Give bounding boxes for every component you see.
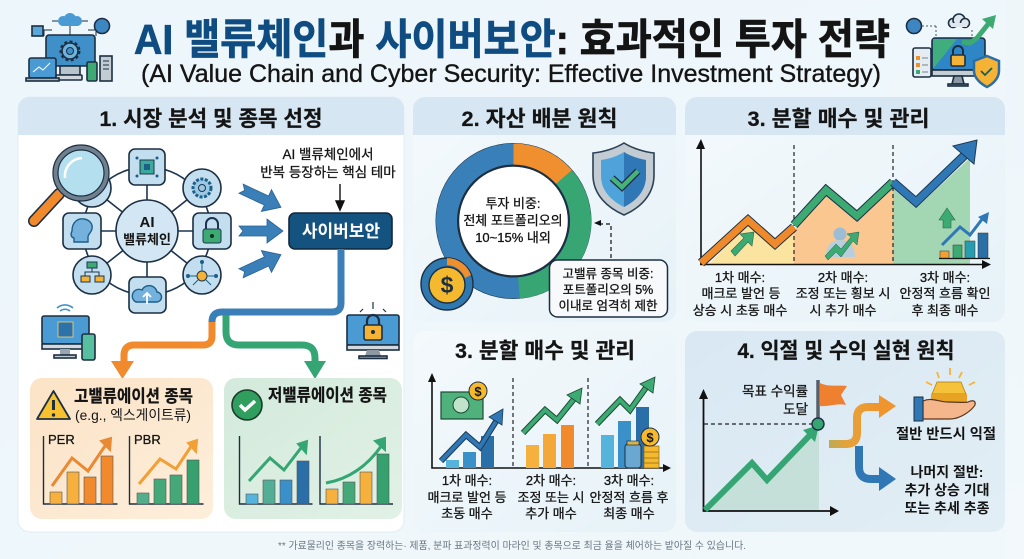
text: investment weight: 10~15% 내외 <box>475 230 551 245</box>
icon: padlock <box>203 218 221 243</box>
panel: 1. market analysis <box>18 97 404 532</box>
text: lower stage labels: 초동 매수 <box>441 506 493 521</box>
heading: panel 3: 3. 분할 매수 및 관리 <box>748 107 930 131</box>
text: stage labels: 상승 시 초동 매수 <box>693 303 787 318</box>
footer note: ** 가료물리인 종목을 장력하는· 제품, 분파 표과정력이 마라인 및 총목으로 최금 율을 체어하는 밭아질 수 있습니다. <box>278 539 746 552</box>
text: lower stage labels: 최종 매수 <box>603 506 655 521</box>
text: lower stage labels <box>428 473 669 521</box>
icon: gear <box>193 179 211 197</box>
arrow: callout to donut <box>599 224 611 258</box>
icon: green arrow <box>731 232 754 256</box>
text: lower stage labels: 조정 또는 시 <box>517 490 585 505</box>
text: high valuation title: 고밸류에이션 종목 <box>74 387 193 406</box>
box: cyber security <box>289 213 392 249</box>
icon: chip <box>136 156 158 178</box>
text: remaining half: 추가 상승 기대 <box>904 482 990 498</box>
text: hub label: 밸류체인 <box>123 232 171 247</box>
chart: PER: PER <box>48 432 75 447</box>
icon: hand with gold <box>914 368 975 421</box>
arrowhead: callout pointer <box>594 220 601 226</box>
text: stage labels: 안정적 흐름 확인 <box>900 286 990 301</box>
arrow: branch to low valuation <box>226 314 326 379</box>
icon: check circle <box>232 390 262 420</box>
chart: low valuation right <box>320 436 393 504</box>
icon: hierarchy <box>81 262 104 282</box>
card: low valuation <box>224 378 402 519</box>
chart: staged buying bars <box>428 373 671 472</box>
icon: banknote and coin: $ <box>474 384 482 399</box>
text: core theme note: AI 밸류체인에서 <box>282 147 374 162</box>
panel: 3. split buying, bar charts <box>413 331 676 532</box>
heading: panel 4: 4. 익절 및 수익 실현 원칙 <box>738 339 954 363</box>
text: stage labels: 3차 매수: <box>920 270 970 285</box>
heading: panel 2: 2. 자산 배분 원칙 <box>462 107 618 131</box>
text: high valuation title <box>74 387 193 423</box>
text: remaining half <box>904 464 990 516</box>
icon: warning <box>37 391 70 419</box>
text: hub label: AI <box>140 214 154 231</box>
text: core theme note: 반복 등장하는 핵심 테마 <box>260 165 396 180</box>
text: lower stage labels: 매크로 발언 등 <box>428 490 507 505</box>
heading: panel 1: 1. 시장 분석 및 종목 선정 <box>100 107 322 131</box>
callout: high valuation limit: 이내로 엄격히 제한 <box>559 299 658 313</box>
text: stage labels: 조정 또는 횡보 시 <box>796 286 890 301</box>
title: AI 밸류체인과 사이버보안: 효과적인 투자 전략 <box>134 16 890 63</box>
text: investment weight: 전체 포트폴리오의 <box>463 213 563 228</box>
icon: computer network <box>26 13 112 81</box>
text: stage labels: 1차 매수: <box>715 270 765 285</box>
icon: brain head <box>71 219 92 242</box>
icon: monitor lock right <box>347 302 399 358</box>
icon: investor with arrow <box>825 228 859 260</box>
text: investment weight: 투자 비중: <box>485 196 541 211</box>
text: lower stage labels: 3차 매수: <box>604 473 654 488</box>
chart: PBR <box>130 432 204 504</box>
text: lower stage labels: 2차 매수: <box>526 473 576 488</box>
text: investment weight <box>463 196 563 245</box>
chart: allocation donut <box>436 143 592 299</box>
arrow: note to cyber security <box>336 184 344 210</box>
arrow: remainder to trend <box>859 446 896 491</box>
arrow: branch to high valuation <box>111 322 212 379</box>
icon: magnifying glass <box>34 145 109 221</box>
icon: jar and coins <box>625 428 659 468</box>
connector: cyber security trunk <box>212 249 341 322</box>
text: target reached: 도달 <box>783 402 808 417</box>
text: stage labels: 2차 매수: <box>818 270 868 285</box>
icon: shield <box>593 143 654 215</box>
text: hub label <box>123 214 171 247</box>
chart: PBR: PBR <box>134 432 161 447</box>
text: sell half: 절반 반드시 익절 <box>896 426 996 443</box>
chart: PER <box>44 432 118 504</box>
text: remaining half: 또는 추세 추종 <box>904 500 990 516</box>
icon: security monitor <box>906 14 999 87</box>
callout: high valuation limit <box>550 260 668 317</box>
heading: panel 3 lower: 3. 분할 매수 및 관리 <box>455 339 635 363</box>
icon: network node <box>186 260 218 285</box>
icon: mini bars and arrow <box>939 208 990 258</box>
chart: low valuation left <box>240 436 312 504</box>
panel: 4. profit taking <box>685 331 1005 532</box>
text: stage labels <box>693 270 990 318</box>
text: lower stage labels: 안정적 흐름 후 <box>590 490 669 505</box>
icon: banknote and coin <box>441 382 487 419</box>
text: low valuation title: 저밸류에이션 종목 <box>268 386 387 405</box>
subtitle: (AI Value Chain and Cyber Security: Effective Investment Strategy) <box>141 60 881 88</box>
text: stage labels: 후 최종 매수 <box>911 303 979 318</box>
diagram: AI value chain hub <box>63 149 231 313</box>
text: target reached <box>742 384 808 417</box>
text: high valuation title: (e.g., 엑스게이트류) <box>75 407 191 423</box>
text: remaining half: 나머지 절반: <box>911 464 983 480</box>
chart: target return <box>699 380 847 516</box>
text: stage labels: 매크로 발언 등 <box>702 286 781 301</box>
arrows: themes into cyber security <box>236 178 286 284</box>
icon: devices left <box>42 305 95 360</box>
flag: target <box>812 380 847 430</box>
icon: cloud upload <box>132 286 162 304</box>
text: core theme note <box>260 147 396 180</box>
text: lower stage labels: 추가 매수 <box>525 506 577 521</box>
panel: 3. split buying, line chart <box>685 97 1005 322</box>
text: target reached: 목표 수익률 <box>742 384 808 399</box>
card: high valuation <box>30 378 213 519</box>
callout: high valuation limit: 고밸류 종목 비중: <box>563 267 653 281</box>
icon: jar and coins: $ <box>646 430 654 445</box>
icon: dollar coin: $ <box>441 272 454 298</box>
text: lower stage labels: 1차 매수: <box>442 473 492 488</box>
icon: dollar coin <box>421 258 473 310</box>
panel: 2. asset allocation <box>413 97 676 322</box>
chart: staged buying line <box>696 139 991 269</box>
text: stage labels: 시 추가 매수 <box>809 303 877 318</box>
arrow: half to take profit <box>829 395 896 444</box>
callout: high valuation limit: 포트폴리오의 5% <box>563 283 653 297</box>
box: cyber security: 사이버보안 <box>302 222 380 241</box>
